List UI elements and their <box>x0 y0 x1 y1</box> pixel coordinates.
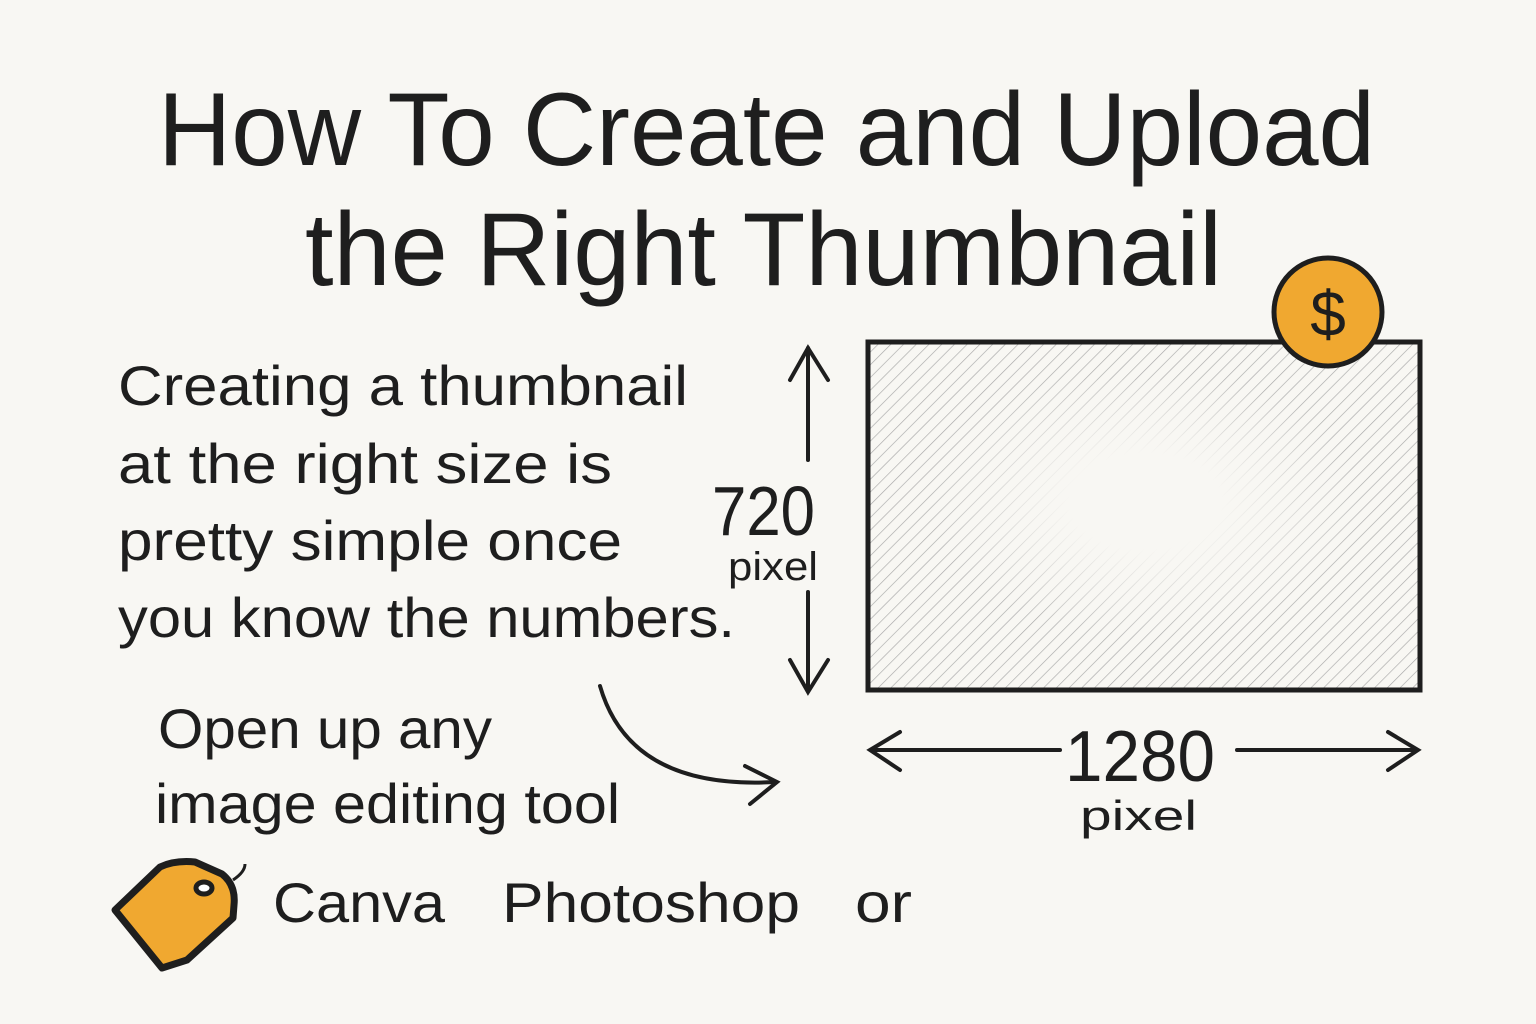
text: tool names: Photoshop <box>502 871 800 934</box>
arrow: height down <box>790 592 828 692</box>
title: the Right Thumbnail <box>305 192 1222 308</box>
text block: intro: pretty simple once <box>118 509 622 572</box>
text block: intro: you know the numbers. <box>118 586 735 649</box>
text: tool names: or <box>855 871 912 934</box>
label: 1280 pixel: pixel <box>1080 792 1197 839</box>
label: 720 pixel <box>712 472 818 589</box>
icon: dollar coin: $ <box>1310 278 1346 350</box>
title <box>158 72 1375 308</box>
text block: intro <box>118 354 735 649</box>
arrow: height up <box>790 348 828 460</box>
arrow: curved to tools <box>600 686 777 804</box>
label: 720 pixel: pixel <box>728 545 818 589</box>
arrow: width <box>870 732 1418 770</box>
text: tool names <box>273 871 912 934</box>
label: 1280 pixel: 1280 <box>1065 717 1215 797</box>
text block: intro: Creating a thumbnail <box>118 354 688 417</box>
thumbnail frame <box>868 342 1420 690</box>
label: 720 pixel: 720 <box>712 472 815 550</box>
text block: intro: at the right size is <box>118 432 612 495</box>
icon: price tag <box>115 862 245 968</box>
text block: open tool: Open up any <box>158 697 492 760</box>
text block: open tool: image editing tool <box>155 772 620 835</box>
label: 1280 pixel <box>1065 717 1215 839</box>
text block: open tool <box>155 697 620 835</box>
icon: dollar coin <box>1274 258 1382 366</box>
title: How To Create and Upload <box>158 72 1375 188</box>
text: tool names: Canva <box>273 871 446 934</box>
